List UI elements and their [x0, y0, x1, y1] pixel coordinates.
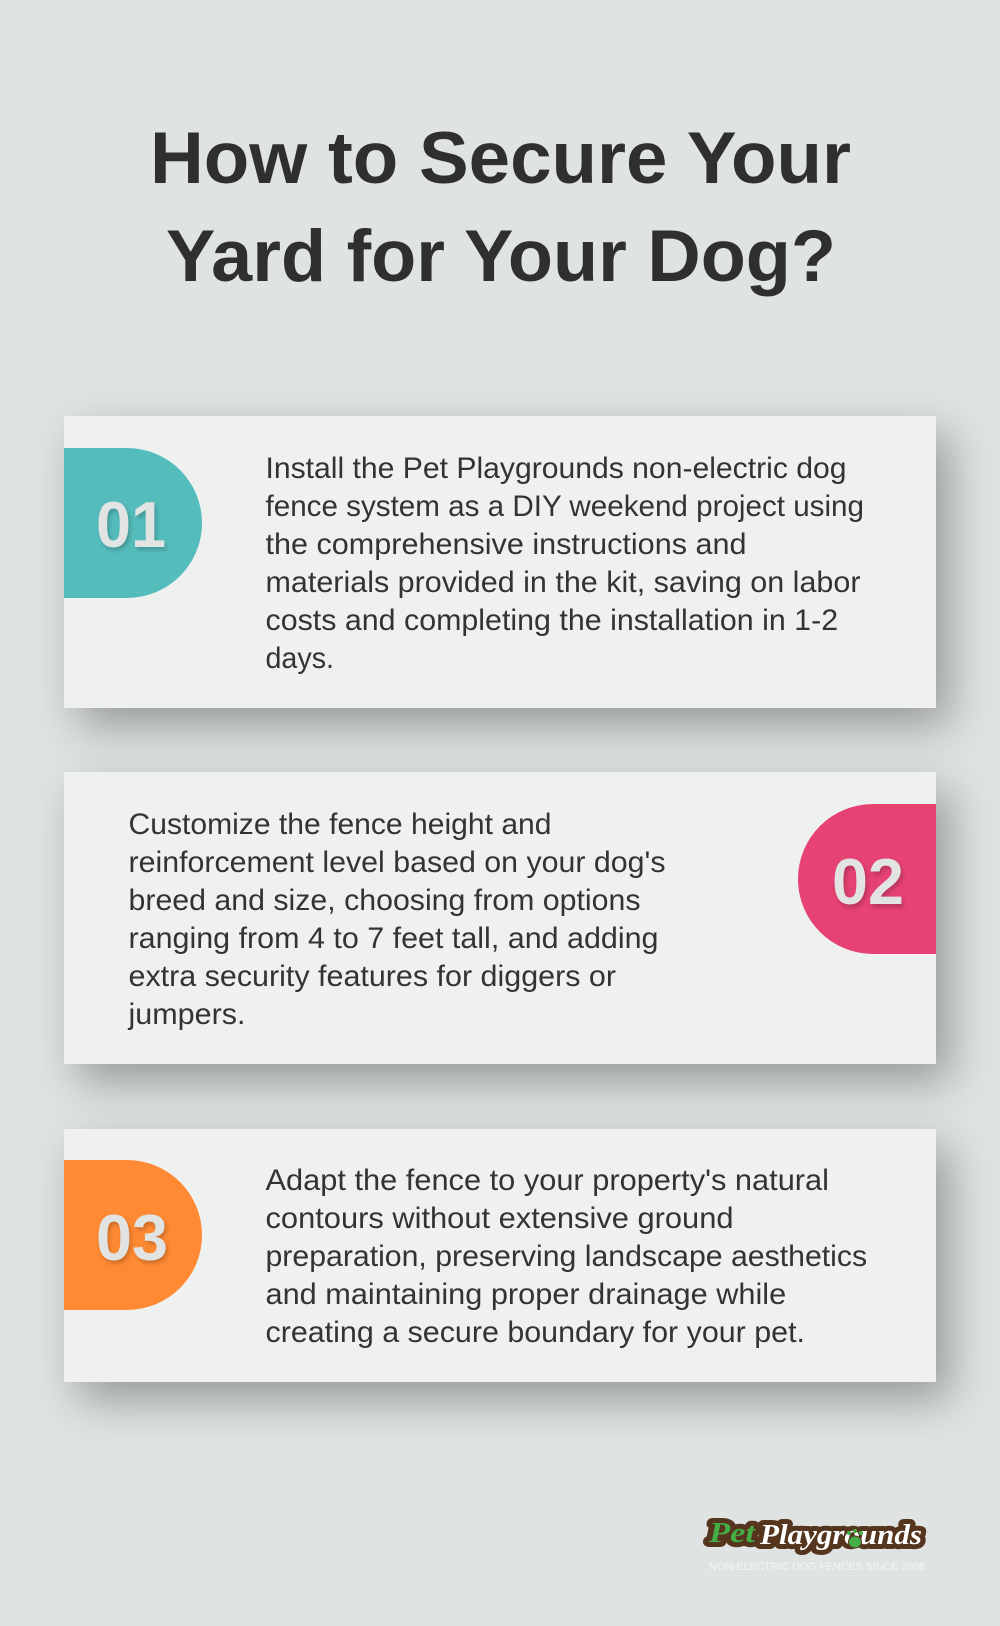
text block: step 1: days. — [266, 642, 334, 675]
text block: step 1: materials provided in the kit, saving on labor — [266, 566, 861, 599]
badge: 01: 01 — [96, 488, 166, 561]
card background 2 — [64, 772, 936, 1064]
text block: step 2: reinforcement level based on your dog's — [128, 846, 666, 879]
text block: step 1: Install the Pet Playgrounds non-electric dog — [266, 452, 846, 485]
logo wordmark outline: Playgrounds — [759, 1519, 922, 1551]
text block: step 2: breed and size, choosing from options — [128, 884, 640, 917]
card background 3 — [64, 1129, 936, 1382]
text block: step 1 — [266, 452, 864, 675]
title: Yard for Your Dog? — [166, 216, 836, 297]
text block: step 1: the comprehensive instructions and — [266, 528, 746, 561]
logo: Pet Playgrounds — [708, 1517, 925, 1573]
text block: step 3 — [266, 1164, 867, 1349]
text block: step 2: Customize the fence height and — [128, 808, 552, 841]
badge: 02 — [798, 804, 936, 954]
badge: 03 — [64, 1160, 202, 1310]
panel: step 3 — [64, 1129, 936, 1382]
panel: step 1 — [64, 416, 936, 708]
text block: step 2: extra security features for diggers or — [128, 960, 616, 993]
panel: step 2 — [64, 772, 936, 1064]
logo wordmark outline: Pet — [708, 1517, 756, 1549]
text block: step 2 — [127, 808, 665, 1031]
text block: step 2: jumpers. — [127, 998, 246, 1031]
title: How to Secure Your — [150, 118, 851, 199]
icon: paw — [847, 1529, 863, 1548]
card background 1 — [64, 416, 936, 708]
badge: 03: 03 — [96, 1201, 168, 1274]
text block: step 2: ranging from 4 to 7 feet tall, and adding — [128, 922, 658, 955]
text block: step 1: costs and completing the installation in 1-2 — [266, 604, 838, 637]
tagline: NON-ELECTRIC DOG FENCES SINCE 2008 — [709, 1561, 925, 1573]
badge: 01 — [64, 448, 202, 598]
text block: step 3: Adapt the fence to your property's natural — [266, 1164, 829, 1197]
badge: 02: 02 — [832, 845, 904, 918]
text block: step 3: preparation, preserving landscape aesthetics — [266, 1240, 867, 1273]
text block: step 3: creating a secure boundary for your pet. — [266, 1316, 805, 1349]
logo wordmark outline — [708, 1517, 922, 1551]
text block: step 3: contours without extensive ground — [266, 1202, 734, 1235]
text block: step 3: and maintaining proper drainage while — [266, 1278, 786, 1311]
text block: step 1: fence system as a DIY weekend project using — [266, 490, 864, 523]
title — [150, 118, 851, 297]
